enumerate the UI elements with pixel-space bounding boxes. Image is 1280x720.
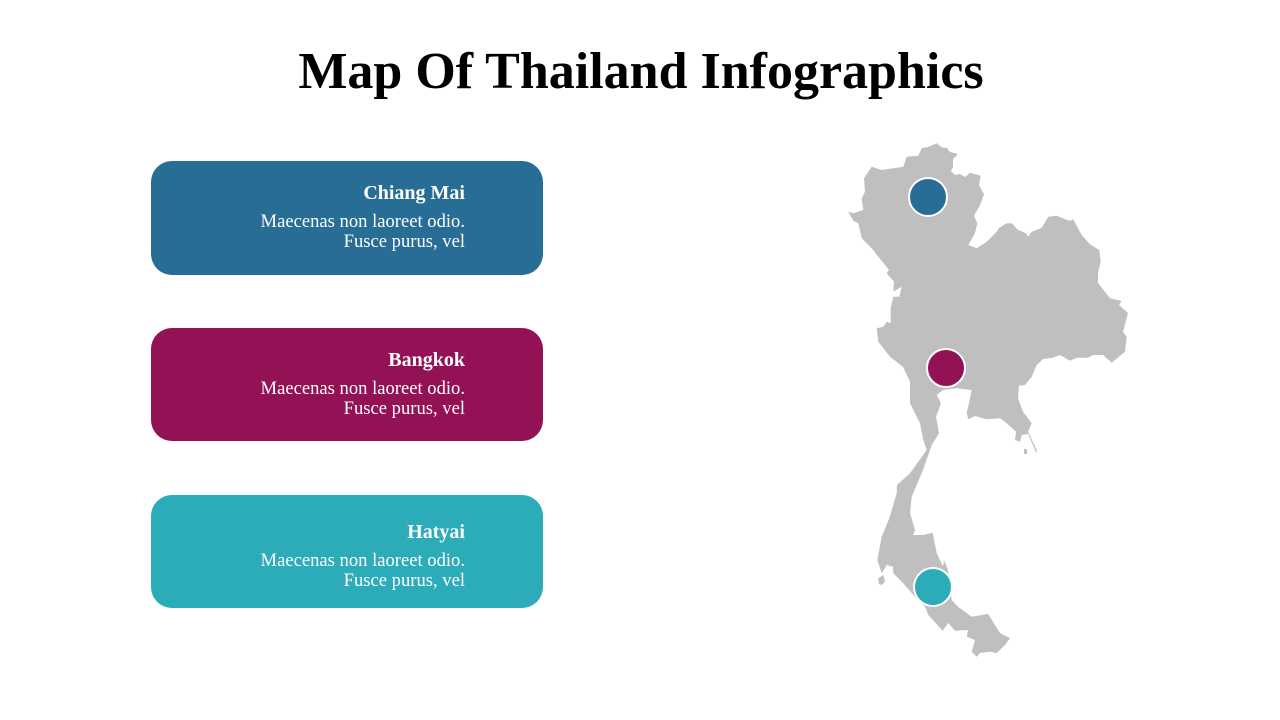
text: Hatyai description [261,550,465,591]
text: Chiang Mai description [261,211,465,252]
title: Map Of Thailand Infographics [298,43,984,100]
panel: Hatyai [151,495,543,608]
marker: Chiang Mai [909,178,947,216]
panel: Chiang Mai [151,161,543,275]
map: country outline [848,143,1128,657]
heading: Bangkok: Bangkok [388,349,465,371]
text: Hatyai description: Fusce purus, vel [344,570,465,591]
text: Hatyai description: Maecenas non laoreet odio. [261,550,465,571]
marker: Hatyai [914,568,952,606]
text: Bangkok description: Maecenas non laoreet odio. [261,378,465,399]
marker: Bangkok [927,349,965,387]
text: Chiang Mai description: Fusce purus, vel [344,231,465,252]
heading: Hatyai: Hatyai [407,521,465,543]
text: Bangkok description: Fusce purus, vel [344,398,465,419]
heading: Chiang Mai: Chiang Mai [363,182,465,204]
text: Chiang Mai description: Maecenas non laoreet odio. [261,211,465,232]
panel: Bangkok [151,328,543,441]
text: Bangkok description [261,378,465,419]
